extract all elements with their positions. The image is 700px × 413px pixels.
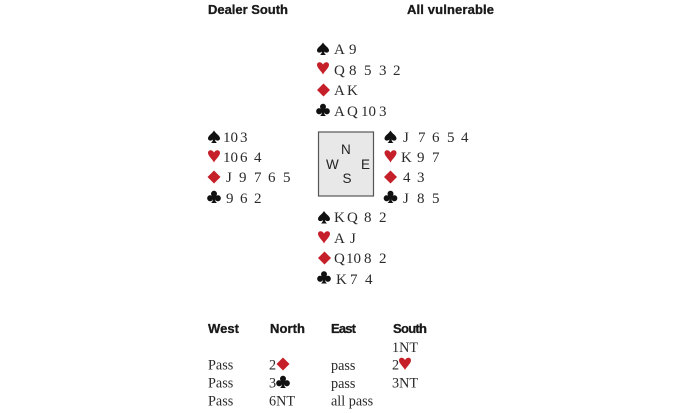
bidding table: Pass [208, 376, 234, 392]
heading: dealer: Dealer South [208, 2, 288, 17]
hand: west: 2 [254, 191, 262, 207]
hand: south: 2 [379, 210, 386, 226]
bidding table: North [270, 321, 305, 336]
hand: south: J [350, 231, 356, 247]
bidding table: Pass [208, 394, 234, 410]
hand: north: 9 [349, 42, 356, 58]
hand: west: 10 [223, 150, 238, 166]
hand: north: 8 [349, 63, 356, 79]
bidding table [208, 321, 427, 410]
hand: south: A [334, 231, 345, 247]
hand: south: Q [347, 210, 358, 226]
bidding table: Pass [208, 358, 234, 374]
hand: east: 4 [403, 170, 411, 186]
hand: south [317, 210, 386, 288]
hand: east: 3 [417, 170, 424, 186]
bidding table: 2 [269, 358, 276, 374]
hand: west: 3 [240, 130, 248, 146]
compass box: S [342, 171, 352, 186]
hand: south: 2 [379, 251, 386, 267]
compass box: W [326, 157, 339, 172]
hand: south: 8 [364, 251, 372, 267]
heading: vulnerability: All vulnerable [407, 2, 494, 17]
hand: north: A [334, 42, 345, 58]
hand: south: K [336, 272, 347, 288]
hand: east [384, 130, 469, 207]
hand: north: 5 [364, 63, 372, 79]
hand: north: 2 [393, 63, 400, 79]
bidding table: 6NT [269, 394, 295, 410]
bidding table: East [331, 321, 357, 336]
hand: west: 6 [240, 191, 248, 207]
hand: east: 4 [461, 130, 469, 146]
hand: east: 5 [447, 130, 454, 146]
hand: west: 9 [226, 191, 234, 207]
hand: west: J [226, 170, 232, 186]
compass box [318, 132, 374, 196]
bidding table: 1NT [392, 340, 418, 356]
hand: east: 8 [417, 191, 424, 207]
compass box: N [341, 142, 351, 157]
hand: south: K [334, 210, 345, 226]
hand: north: A [334, 83, 345, 99]
hand: west: 6 [240, 150, 248, 166]
hand: west: 7 [254, 170, 262, 186]
hand: north: Q [347, 104, 358, 120]
hand: north: Q [334, 63, 345, 79]
hand: west: 5 [283, 170, 290, 186]
compass box: E [361, 157, 370, 172]
bidding table: 3 [269, 376, 276, 392]
hand: west: 10 [223, 130, 238, 146]
hand: south: 4 [365, 272, 373, 288]
hand: north: 3 [379, 104, 386, 120]
hand: west: 6 [268, 170, 276, 186]
bidding table: 2 [392, 358, 399, 374]
hand: east: 5 [432, 191, 440, 207]
bidding table: West [208, 321, 240, 336]
bidding table: South [393, 321, 427, 336]
bidding table: pass [331, 376, 356, 392]
bidding table: 3NT [392, 376, 418, 392]
hand: west [207, 130, 290, 207]
hand: south: 8 [364, 210, 372, 226]
hand: south: 10 [346, 251, 361, 267]
bidding table: all pass [331, 394, 374, 410]
hand: north [316, 42, 400, 120]
hand: west: 9 [239, 170, 246, 186]
bidding table: pass [331, 358, 356, 374]
hand: north: A [334, 104, 345, 120]
hand: north: K [347, 83, 358, 99]
hand: east: 9 [417, 150, 424, 166]
hand: north: 10 [361, 104, 376, 120]
hand: north: 3 [379, 63, 386, 79]
hand: south: Q [334, 251, 345, 267]
hand: east: 7 [432, 150, 440, 166]
hand: south: 7 [350, 272, 358, 288]
hand: east: 7 [418, 130, 426, 146]
hand: east: K [401, 150, 412, 166]
hand: east: 6 [432, 130, 440, 146]
hand: west: 4 [254, 150, 262, 166]
hand: east: J [403, 191, 409, 207]
hand: east: J [403, 130, 409, 146]
